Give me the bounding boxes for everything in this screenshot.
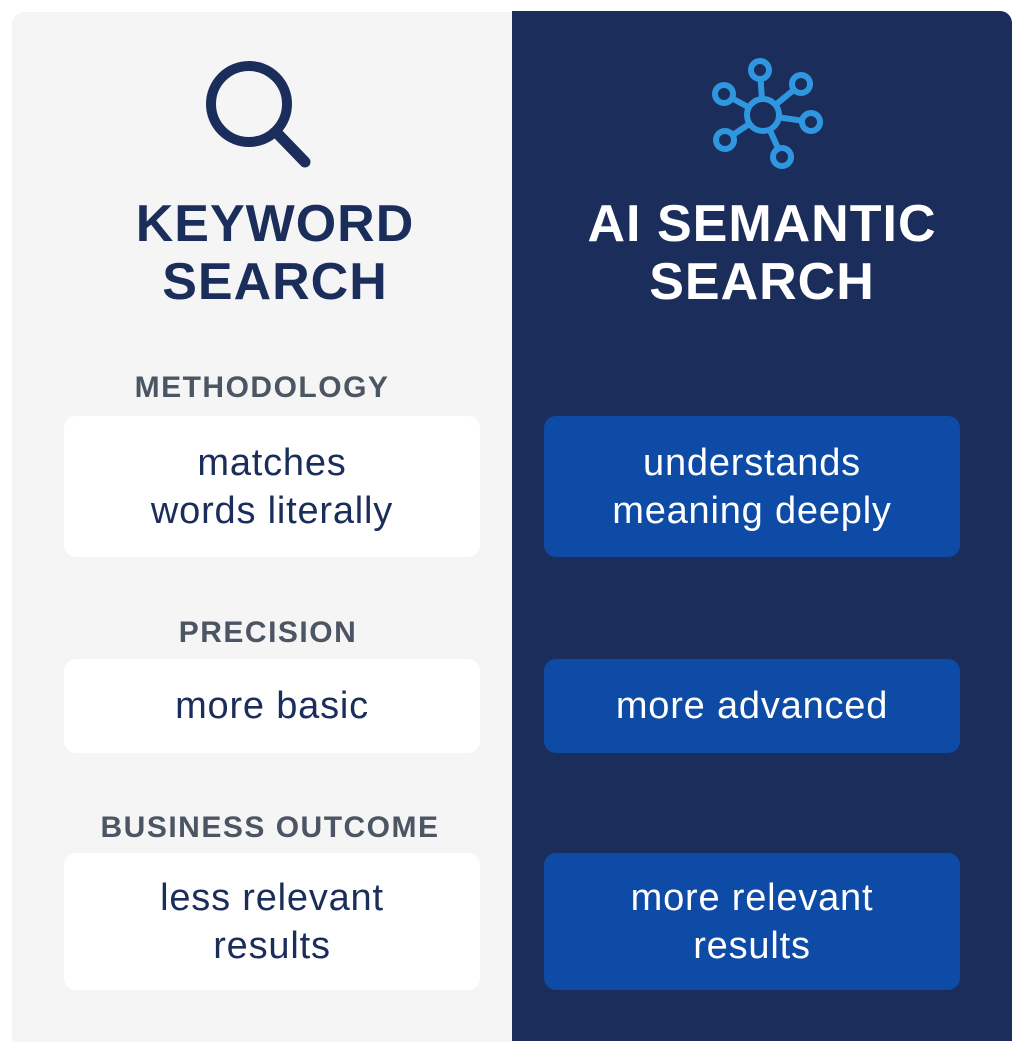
card: more relevant results xyxy=(544,853,960,990)
card: less relevant results: results xyxy=(213,924,331,966)
title: AI semantic search: AI SEMANTIC xyxy=(588,195,936,253)
icon: magnifying glass xyxy=(206,61,310,168)
card: more advanced xyxy=(544,659,960,753)
title: keyword search: SEARCH xyxy=(162,253,388,311)
card: matches words literally: words literally xyxy=(151,490,393,532)
title: AI semantic search xyxy=(588,195,936,311)
card: less relevant results xyxy=(64,853,480,990)
label: business outcome: BUSINESS OUTCOME xyxy=(100,811,440,844)
card: more basic: more basic xyxy=(175,685,369,727)
card: more relevant results: results xyxy=(693,924,811,966)
card: less relevant results: less relevant xyxy=(160,876,384,918)
card: understands meaning deeply: understands xyxy=(643,442,861,484)
label: precision: PRECISION xyxy=(179,616,357,649)
title: keyword search xyxy=(136,195,414,311)
title: AI semantic search: SEARCH xyxy=(649,253,875,311)
card: more relevant results: more relevant xyxy=(631,876,873,918)
card: matches words literally: matches xyxy=(197,442,347,484)
card: understands meaning deeply: meaning deeply xyxy=(612,490,892,532)
title: keyword search: KEYWORD xyxy=(136,195,414,253)
card: understands meaning deeply xyxy=(544,416,960,557)
card: matches words literally xyxy=(64,416,480,557)
label: methodology: METHODOLOGY xyxy=(135,371,389,404)
card: more advanced: more advanced xyxy=(616,685,888,727)
panel: AI semantic search xyxy=(512,11,1012,1041)
card: more basic xyxy=(64,659,480,753)
icon: network xyxy=(712,58,823,169)
panel: keyword search xyxy=(12,12,512,1042)
